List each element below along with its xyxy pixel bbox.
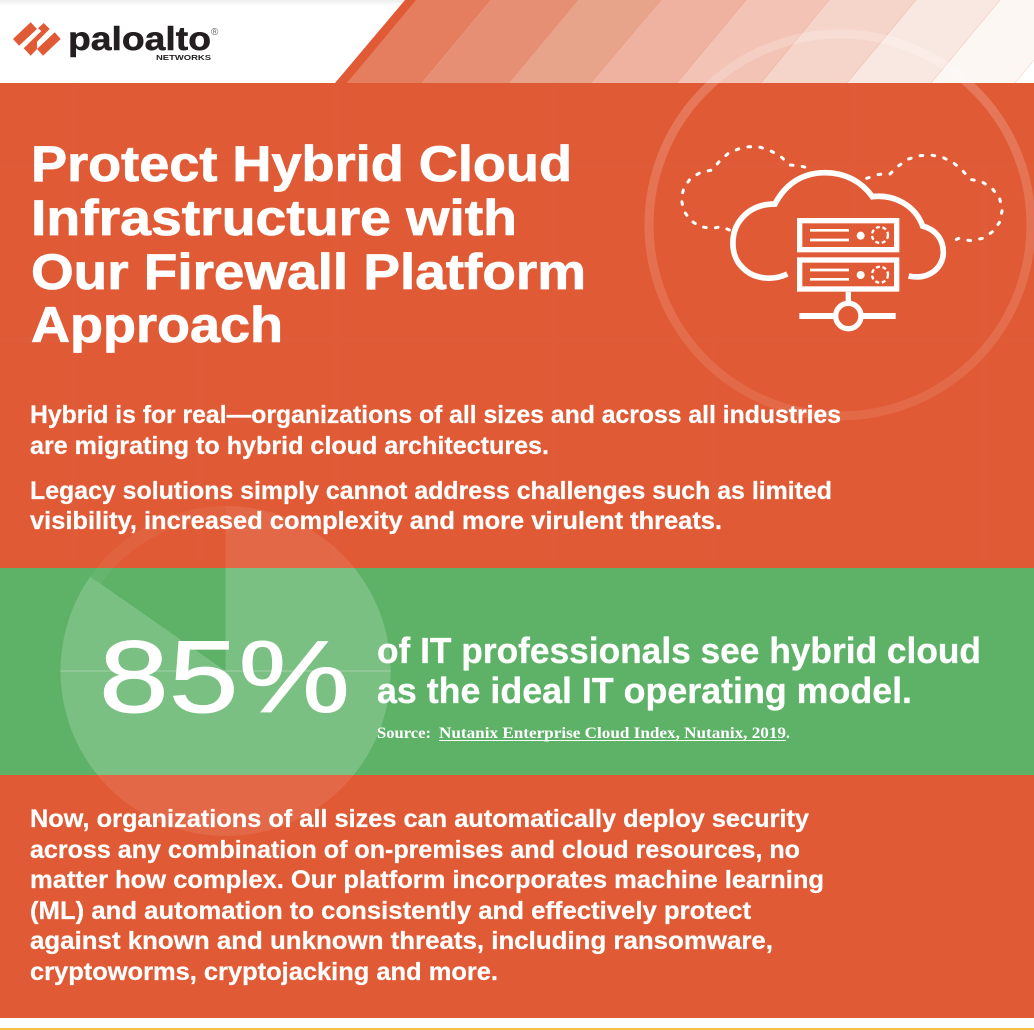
source citation: .	[786, 725, 790, 742]
logo	[13, 20, 219, 62]
title: Our Firewall Platform	[31, 244, 586, 300]
network connector	[799, 292, 896, 329]
header bar	[0, 0, 1034, 83]
intro paragraph 1: Hybrid is for real—organizations of all sizes and across all industries	[30, 401, 841, 429]
registered mark: ®	[211, 27, 219, 38]
panel: green statistic band	[0, 568, 1034, 775]
closing paragraph: matter how complex. Our platform incorporates machine learning	[30, 866, 824, 894]
intro paragraph 1	[30, 401, 841, 460]
panel: orange top	[0, 83, 1034, 568]
closing paragraph: Now, organizations of all sizes can automatically deploy security	[30, 805, 809, 833]
wordmark sub-line: NETWORKS	[156, 55, 211, 62]
closing paragraph	[30, 805, 824, 986]
dashed left cloud	[681, 147, 811, 230]
cloud outline	[733, 173, 943, 278]
icon: cloud with servers	[681, 147, 1002, 329]
intro paragraph 2	[30, 477, 832, 535]
statistic: 85%: 85%	[99, 620, 350, 734]
title: Approach	[31, 297, 283, 353]
panel: orange bottom	[0, 775, 1034, 1018]
closing paragraph: across any combination of on-premises and cloud resources, no	[30, 836, 800, 864]
pie chart: 85 percent	[60, 506, 391, 836]
statistic description	[377, 630, 981, 711]
statistic description: of IT professionals see hybrid cloud	[377, 630, 981, 671]
title	[31, 136, 586, 353]
title: Infrastructure with	[31, 190, 517, 246]
title: Protect Hybrid Cloud	[31, 136, 572, 192]
wordmark: paloalto	[68, 20, 211, 57]
closing paragraph: cryptoworms, cryptojacking and more.	[30, 958, 498, 986]
server bottom	[800, 260, 897, 289]
statistic description: as the ideal IT operating model.	[377, 670, 912, 711]
icon: logo mark	[13, 22, 61, 56]
closing paragraph: against known and unknown threats, including ransomware,	[30, 927, 773, 955]
closing paragraph: (ML) and automation to consistently and effectively protect	[30, 897, 752, 925]
intro paragraph 2: visibility, increased complexity and more virulent threats.	[30, 507, 722, 535]
header diagonal stripes	[335, 0, 1034, 83]
ring behind cloud icon	[649, 34, 1031, 416]
server top	[800, 221, 897, 250]
intro paragraph 2: Legacy solutions simply cannot address challenges such as limited	[30, 477, 832, 505]
intro paragraph 1: are migrating to hybrid cloud architectures.	[30, 432, 549, 460]
dashed right cloud	[867, 155, 1002, 243]
source citation: Source:	[377, 725, 431, 742]
source citation: Nutanix Enterprise Cloud Index, Nutanix, 2019	[439, 725, 786, 742]
